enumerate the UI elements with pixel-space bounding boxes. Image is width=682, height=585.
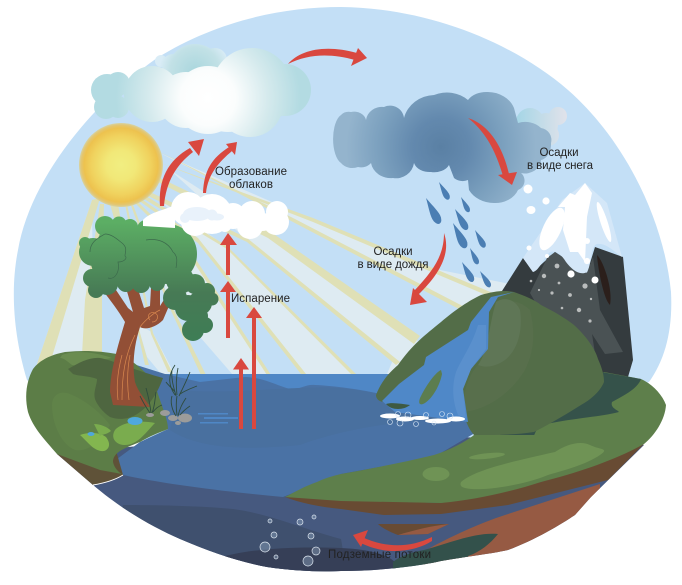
sun rays (36, 152, 507, 374)
crevice (597, 255, 611, 305)
sun (79, 123, 163, 207)
cloud body (143, 192, 289, 239)
trunk and branches (104, 286, 172, 407)
arrow: underground flow (353, 530, 432, 551)
groundwater base (57, 437, 644, 572)
label: cloud formation: Образование (215, 166, 287, 178)
deeper water layer (122, 505, 342, 572)
island light grass (52, 393, 110, 450)
arrow: evaporation to cloud left (160, 139, 204, 206)
dark shadow behind hill (500, 370, 641, 435)
small leaf (80, 433, 109, 451)
label: snow precipitation second line: в виде снега (527, 160, 594, 172)
label: cloud formation second line: облаков (229, 179, 273, 191)
island brown base (50, 430, 123, 485)
label: snow precipitation: Осадки (540, 147, 578, 159)
big leaf (113, 422, 155, 445)
stream highlights (453, 325, 486, 418)
arrow: upper vertical (220, 233, 237, 275)
waterfall (380, 292, 514, 426)
arrow: evaporation to cloud right (203, 142, 237, 193)
dark rock (500, 247, 633, 380)
bark lines (117, 310, 160, 400)
brown lens (378, 524, 449, 535)
mountain with snow cap (500, 183, 633, 380)
storm body (333, 92, 551, 203)
green hill (376, 291, 604, 435)
island grass (26, 351, 168, 474)
label: rain precipitation second line: в виде дождя (358, 259, 428, 271)
water stream (382, 292, 514, 422)
left island (26, 351, 168, 485)
rocks (146, 410, 192, 425)
lake (113, 363, 480, 497)
highlights (198, 413, 238, 424)
island lit patch (60, 352, 112, 366)
gray rock face (530, 252, 623, 360)
rocks in stream (386, 403, 410, 409)
stream island (419, 370, 442, 404)
water bubbles (260, 515, 320, 566)
light grass patches (422, 443, 604, 489)
hill lit patch (464, 301, 533, 412)
grass (285, 372, 666, 503)
label: rain precipitation: Осадки (374, 246, 412, 258)
tiny leaf (94, 424, 111, 436)
right island (285, 370, 666, 515)
shore plants (140, 365, 197, 425)
reeds (140, 365, 197, 416)
red arrows (160, 48, 517, 551)
arrow: middle vertical (220, 281, 236, 338)
shoreline (93, 475, 123, 485)
arrow: tall vertical (246, 307, 262, 429)
dark green stratum (393, 534, 498, 568)
tree (79, 216, 218, 407)
lake surface band (165, 374, 420, 400)
cloud: storm (333, 92, 567, 203)
rain drops (422, 181, 492, 289)
underground layers (57, 437, 644, 572)
label: evaporation: Испарение (231, 293, 290, 305)
white snow (534, 183, 614, 262)
lake body (113, 363, 480, 497)
small snowy puff (516, 107, 567, 146)
foliage contours (90, 234, 126, 278)
pale snow cap (523, 183, 622, 273)
low white cloud (143, 192, 289, 239)
island shadow (68, 358, 163, 419)
arrow: rain (410, 233, 446, 305)
water drops on leaves (88, 417, 142, 436)
red rock stratum (424, 484, 600, 564)
darkest water layer (225, 548, 396, 572)
pale ray wedges (52, 154, 507, 374)
snowflakes (530, 264, 592, 323)
cloud body (91, 48, 311, 137)
cloud: high white and teal (91, 44, 311, 137)
surface shadow (170, 387, 440, 448)
falling snow balls (524, 184, 598, 284)
cloud top puffs (155, 44, 227, 100)
foliage (79, 216, 218, 341)
leaves (80, 417, 155, 451)
label: groundwater flow: Подземные потоки (328, 549, 431, 561)
red lens (398, 524, 449, 535)
arrow: wind between clouds (288, 48, 367, 66)
hill lighter patch (478, 299, 521, 367)
pale inner puff (180, 207, 224, 223)
hill body (376, 291, 604, 435)
cream ray stripes (35, 151, 500, 375)
arrow: lake vertical (233, 358, 249, 429)
arrow: cloud to snow (468, 118, 517, 185)
sky dome (14, 7, 671, 440)
foam (380, 414, 465, 424)
soil band (285, 444, 644, 515)
